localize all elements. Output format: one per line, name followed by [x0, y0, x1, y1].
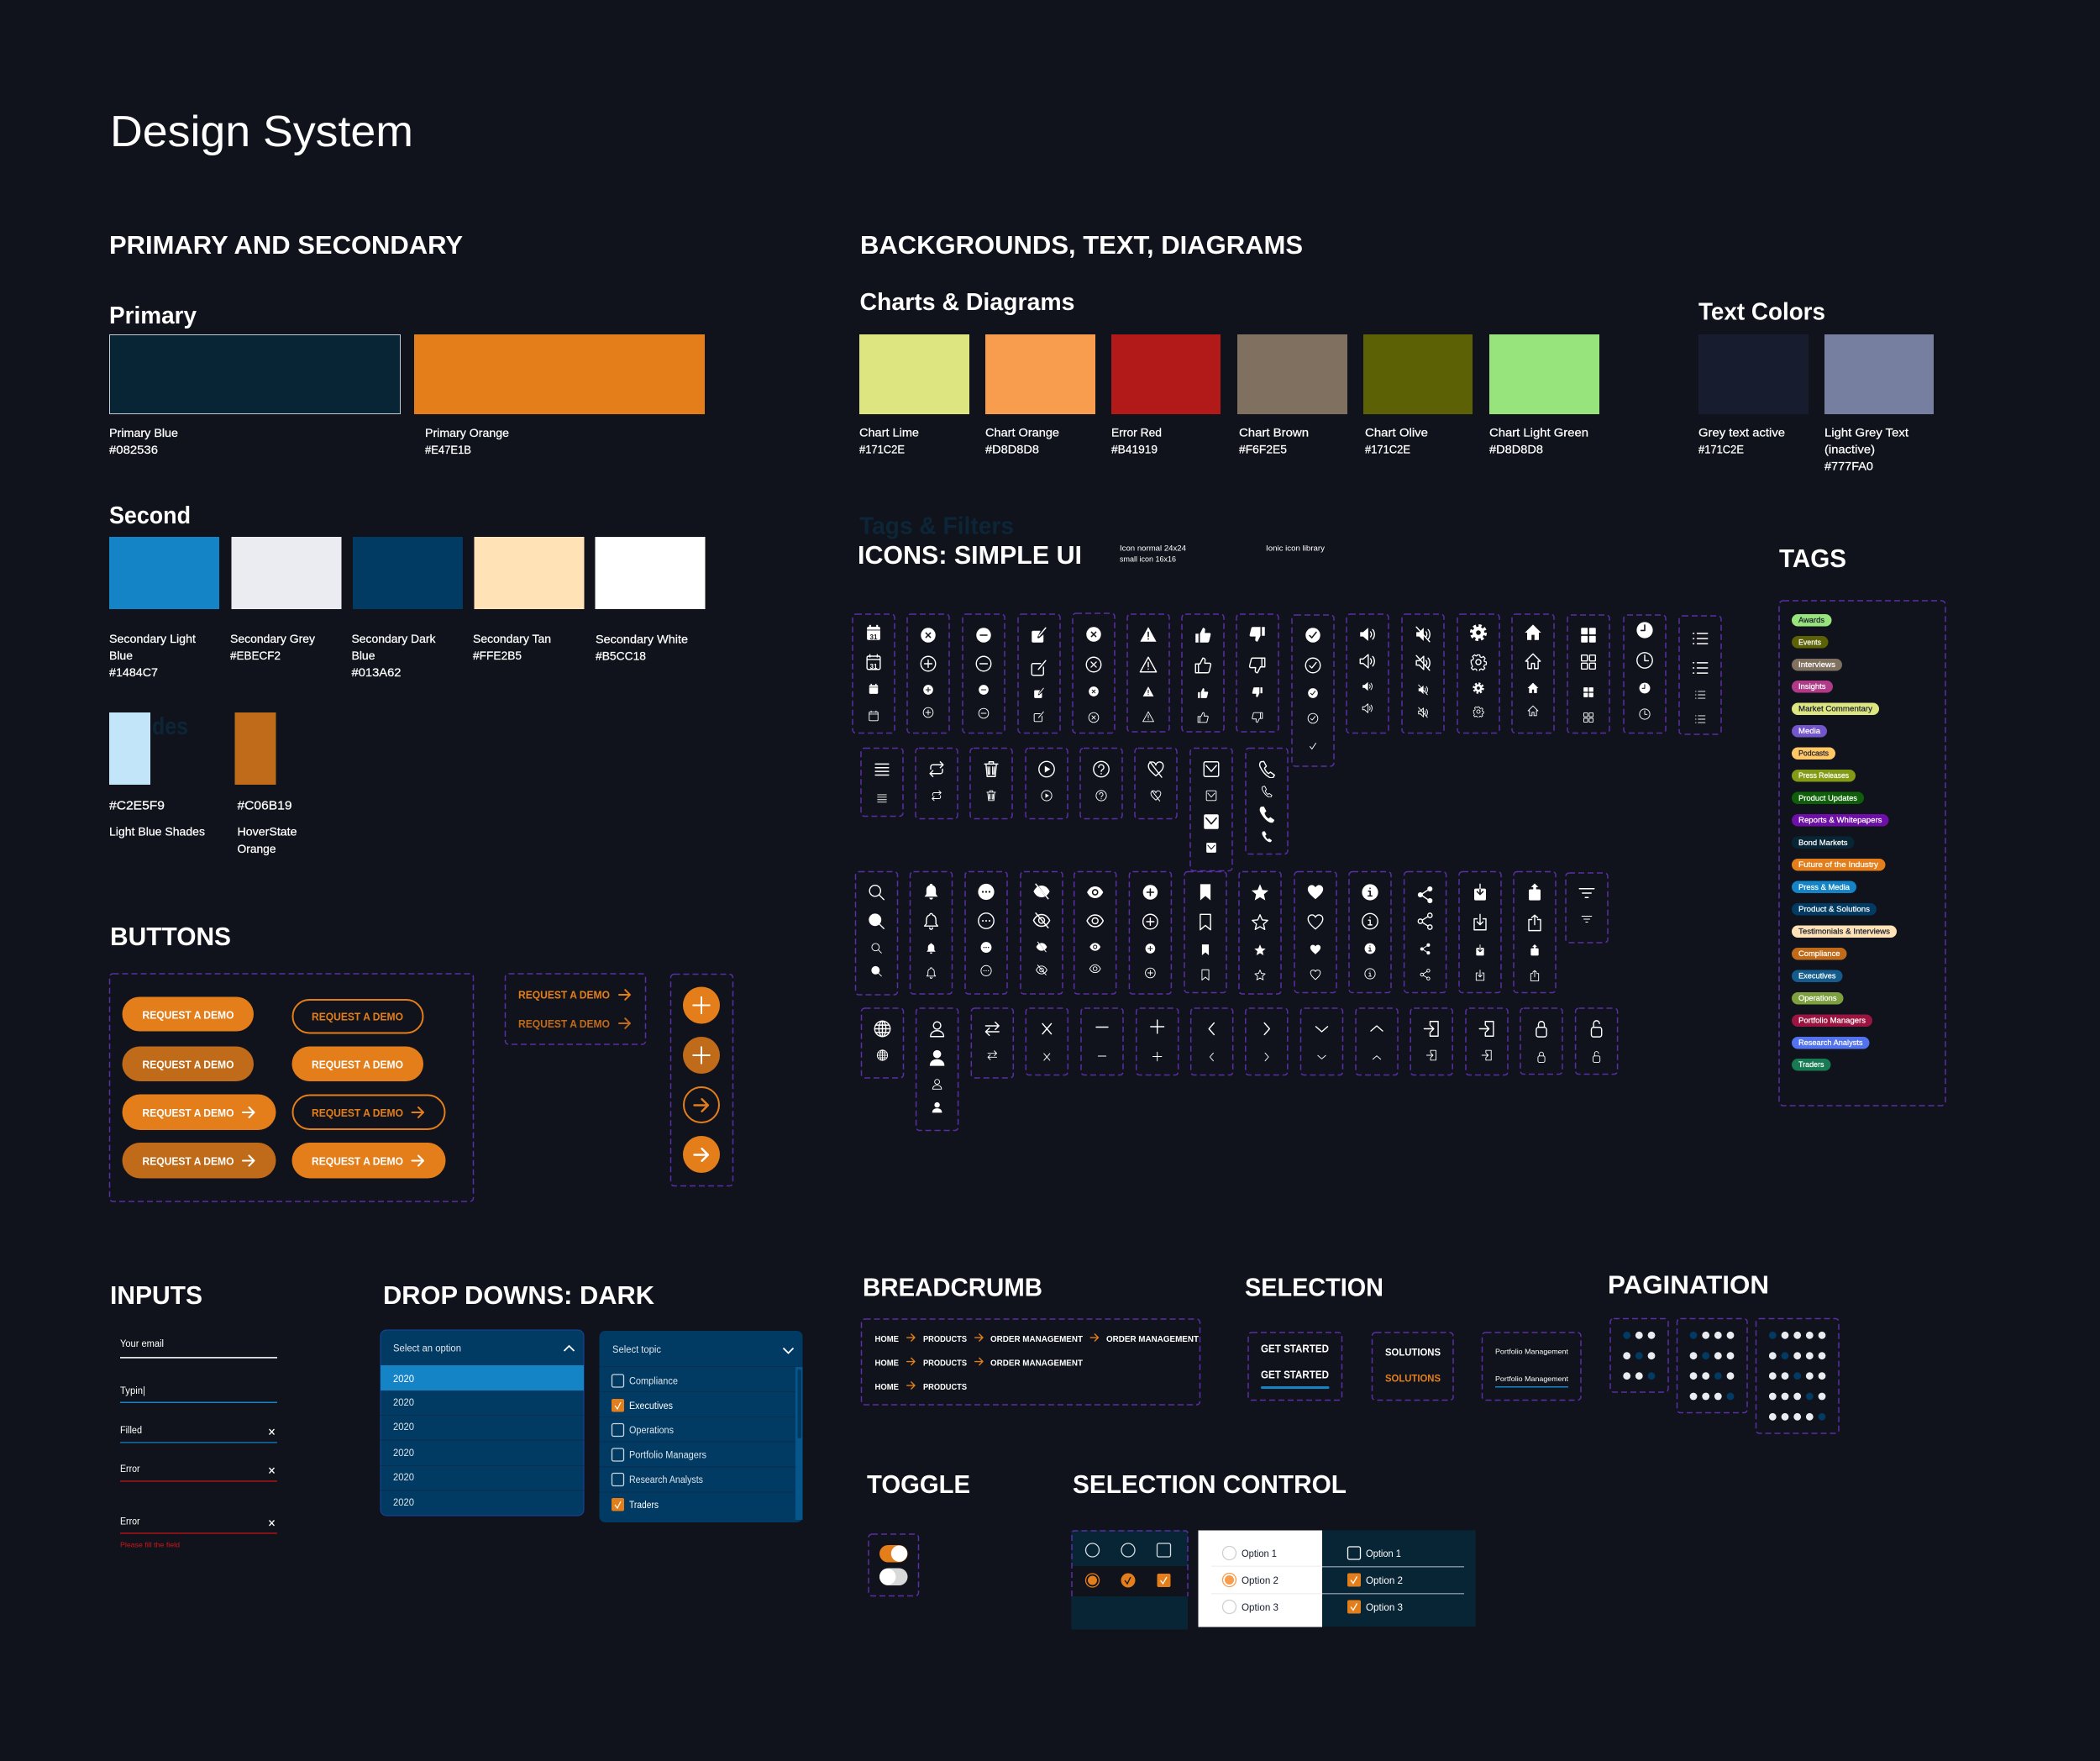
tag: Traders: Traders: [1798, 1060, 1824, 1069]
input: error: Error: [120, 1464, 140, 1475]
swatch: secondary white: Secondary White: [596, 632, 688, 645]
note: icon sizes: Icon normal 24x24: [1120, 544, 1186, 553]
tag: Events: Events: [1798, 639, 1821, 647]
icon column: play: [1026, 748, 1068, 818]
dropdown: select an option: 2020: [393, 1448, 414, 1459]
tag: Press and Media: [1792, 880, 1856, 893]
tag: Product Updates: Product Updates: [1798, 794, 1858, 802]
tag: Portfolio Managers: [1792, 1015, 1872, 1027]
tag: Media: [1792, 725, 1827, 738]
icons: row 4: [862, 1008, 1618, 1131]
panel: radio list on white: Option 3: [1242, 1601, 1278, 1613]
dropdown: select an option: 2020: [393, 1375, 414, 1385]
tag: Executives: Executives: [1798, 972, 1836, 980]
swatch: chart light green: #D8D8D8: [1489, 442, 1543, 455]
tag: Executives: [1792, 970, 1843, 982]
swatch: light grey text: (inactive): [1824, 442, 1875, 455]
input: error: [120, 1464, 277, 1482]
icon column: share: [1404, 872, 1446, 993]
icon column: close circle: [1073, 613, 1115, 733]
icon column: trash: [970, 748, 1012, 818]
swatch: error red: #B41919: [1111, 442, 1158, 455]
dropdown: select topic: Select topic: [612, 1345, 661, 1355]
tag: Interviews: [1792, 659, 1842, 670]
breadcrumb: three levels: PRODUCTS: [923, 1358, 967, 1368]
tag: Product Updates: [1792, 791, 1864, 804]
icon column: minus: [1081, 1008, 1123, 1075]
icon column: plus: [1137, 1008, 1179, 1075]
tag: Operations: [1792, 992, 1843, 1005]
swatch: secondary dark blue: Blue: [351, 649, 375, 662]
icon column: checkmark: [1292, 615, 1334, 766]
swatch: chart light green: Chart Light Green: [1489, 425, 1588, 439]
icon column: unlock: [1576, 1008, 1618, 1074]
tag: Reports and Whitepapers: [1792, 814, 1888, 827]
heading: toggle: TOGGLE: [867, 1469, 970, 1499]
dropdown: select topic: Traders: [629, 1501, 659, 1511]
icon column: lock: [1520, 1008, 1562, 1074]
button: outline: [292, 1000, 423, 1033]
selection: solutions: [1373, 1333, 1453, 1400]
swatch: secondary light blue: Secondary Light: [109, 632, 196, 645]
icon column: grid: [1567, 615, 1609, 733]
button: hover: REQUEST A DEMO: [143, 1059, 234, 1070]
button: filled: REQUEST A DEMO: [143, 1010, 234, 1022]
input: filled: [120, 1426, 277, 1443]
selection: get started: [1248, 1333, 1342, 1400]
swatch: primary orange: Primary Orange: [425, 426, 509, 439]
tag: Testimonials and Interviews: Testimonials & Interviews: [1798, 928, 1891, 936]
icon column: search: [855, 872, 897, 995]
tag: Research Analysts: [1792, 1037, 1870, 1049]
swatch: hover state orange: HoverState: [237, 825, 297, 838]
icon column: mail: [1190, 748, 1232, 870]
input: default: Your email: [120, 1339, 164, 1349]
button: outline: REQUEST A DEMO: [312, 1012, 403, 1023]
tag: Product and Solutions: Product & Solutions: [1798, 905, 1871, 913]
tag: Media: Media: [1798, 727, 1820, 735]
heading: selection control: SELECTION CONTROL: [1073, 1469, 1347, 1499]
icon column: filter: [1566, 873, 1608, 943]
icon column: edit: [1018, 614, 1060, 733]
toggle: off: [879, 1568, 907, 1585]
swatch: primary orange: #E47E1B: [425, 443, 471, 456]
tag: Future of the Industry: [1792, 859, 1885, 870]
swatch: light grey text: [1824, 334, 1934, 472]
icon column: eye: [1074, 872, 1116, 994]
dropdown: select topic: [600, 1331, 803, 1522]
swatch: error red: Error Red: [1111, 425, 1162, 439]
dropdown: select topic: Compliance: [629, 1376, 678, 1386]
input: error with message: Error: [120, 1517, 140, 1527]
swatch: primary blue: [109, 334, 400, 456]
swatch: light grey text: Light Grey Text: [1824, 425, 1908, 439]
icon column: chevron down: [1300, 1008, 1342, 1075]
tag: Press Releases: [1792, 770, 1856, 781]
breadcrumb: two levels: [875, 1382, 967, 1392]
pagination: four pages: [1677, 1319, 1747, 1413]
swatch: secondary grey: [230, 537, 341, 662]
icon column: eye off: [1021, 872, 1063, 994]
icon column: volume: [1347, 614, 1389, 733]
panel: round icon buttons: [670, 975, 732, 1186]
ghost heading: tags and filters: Tags & Filters: [859, 513, 1014, 539]
breadcrumb: four levels: ORDER MANAGEMENT: [1106, 1334, 1200, 1344]
panel: selection control states: [1072, 1531, 1188, 1630]
icon column: thumbs down: [1236, 614, 1278, 732]
dropdown: select an option: [381, 1330, 584, 1516]
swatch: chart olive: #171C2E: [1365, 442, 1410, 455]
dropdown: select an option: Select an option: [393, 1344, 461, 1354]
button: filled secondary: REQUEST A DEMO: [312, 1059, 403, 1070]
tag: Interviews: Interviews: [1798, 660, 1836, 669]
heading: charts and diagrams: Charts & Diagrams: [860, 289, 1075, 316]
tag: Traders: [1792, 1059, 1831, 1070]
icon column: time: [1624, 615, 1666, 733]
icon column: bookmark: [1184, 872, 1226, 993]
icon column: chevron forward: [1246, 1008, 1288, 1075]
panel: radio list on white: [1198, 1531, 1322, 1627]
breadcrumb: four levels: ORDER MANAGEMENT: [990, 1334, 1084, 1344]
heading: selection: SELECTION: [1245, 1272, 1383, 1302]
swatch: error red: [1111, 334, 1221, 455]
icon column: list: [1679, 616, 1721, 734]
icon column: calendar: 31: [870, 633, 878, 641]
tag: Podcasts: Podcasts: [1798, 749, 1829, 758]
icon column: menu: [861, 748, 903, 817]
swatch: chart brown: #F6F2E5: [1239, 442, 1287, 455]
heading: pagination: PAGINATION: [1608, 1270, 1769, 1299]
swatch: chart light green: [1489, 334, 1599, 455]
tag: Reports and Whitepapers: Reports & Whitepapers: [1798, 816, 1882, 824]
tag: Bond Markets: Bond Markets: [1798, 838, 1848, 847]
button: outline with arrow: REQUEST A DEMO: [312, 1107, 403, 1119]
button: filled secondary: [292, 1047, 423, 1081]
button: filled: [123, 996, 254, 1032]
swatch: secondary light blue: Blue: [109, 649, 133, 662]
dropdown: select an option: 2020: [393, 1498, 414, 1508]
swatch: light grey text: #777FA0: [1824, 459, 1873, 472]
swatch: secondary white: #B5CC18: [596, 649, 646, 662]
round button: plus hover: [683, 1037, 720, 1074]
icon column: log in: [1410, 1008, 1452, 1075]
breadcrumb: three levels: HOME: [875, 1358, 899, 1368]
icon column: bell: [911, 872, 953, 994]
tag: Bond Markets: [1792, 837, 1855, 849]
dropdown: select an option: 2020: [393, 1398, 414, 1408]
panel: radio list on white: Option 1: [1242, 1548, 1277, 1559]
note: icon library: Ionic icon library: [1266, 544, 1325, 553]
breadcrumb: three levels: [875, 1358, 1084, 1368]
icon column: globe: [862, 1008, 904, 1078]
input: filled: Filled: [120, 1426, 142, 1436]
heading: second: Second: [109, 502, 191, 529]
swatch: secondary light blue: #1484C7: [109, 665, 158, 679]
panel: breadcrumb: [862, 1319, 1200, 1405]
swatch: grey text active: #171C2E: [1698, 442, 1744, 455]
icon column: heart dislike: [1135, 748, 1177, 818]
swatch: light blue shade: Light Blue Shades: [109, 825, 205, 838]
icon column: warning: [1127, 614, 1169, 732]
swatch: chart lime: Chart Lime: [859, 425, 919, 439]
tag: Product and Solutions: [1792, 903, 1877, 916]
swatch: secondary dark blue: Secondary Dark: [351, 632, 436, 645]
swatch: chart orange: Chart Orange: [985, 425, 1059, 439]
dropdown: select an option: 2020: [393, 1422, 414, 1432]
swatch: grey text active: [1698, 334, 1809, 455]
button: filled secondary with arrow: [292, 1143, 445, 1178]
pagination: three pages: [1610, 1319, 1668, 1392]
icons: row 3: [855, 872, 1608, 995]
heading: icons: ICONS: SIMPLE UI: [858, 540, 1082, 570]
swatch: secondary tan: Secondary Tan: [473, 632, 551, 645]
breadcrumb: three levels: ORDER MANAGEMENT: [990, 1358, 1084, 1368]
tag: Events: [1792, 636, 1828, 649]
selection: solutions: SOLUTIONS: [1385, 1348, 1441, 1358]
tag: Future of the Industry: Future of the Industry: [1798, 860, 1879, 869]
icon column: home: [1512, 614, 1554, 733]
pagination: five pages: [1756, 1319, 1839, 1433]
icon column: ellipsis: [965, 872, 1007, 994]
swatch: chart brown: Chart Brown: [1239, 425, 1309, 439]
swatch: chart lime: [859, 334, 969, 455]
input: typing: Typin|: [120, 1386, 145, 1396]
icon column: information: [1349, 872, 1391, 993]
title: Design System: [110, 108, 413, 156]
icon column: chevron up: [1356, 1008, 1398, 1075]
dropdown: select topic: Research Analysts: [629, 1475, 703, 1485]
heading: drop downs: DROP DOWNS: DARK: [383, 1280, 655, 1310]
heading: inputs: INPUTS: [110, 1280, 202, 1310]
button: hover with arrow: REQUEST A DEMO: [143, 1156, 234, 1168]
tag: Market Commentary: Market Commentary: [1798, 705, 1873, 713]
link button: default: REQUEST A DEMO: [518, 990, 610, 1001]
selection: portfolio management: [1482, 1333, 1581, 1400]
button: hover: [123, 1047, 254, 1081]
icon column: chevron back: [1191, 1008, 1233, 1075]
panel: buttons: [109, 974, 474, 1201]
button: filled with arrow: [123, 1094, 276, 1130]
tag: Press Releases: Press Releases: [1798, 771, 1849, 780]
ghost heading: shades: des: [152, 713, 188, 740]
tag: Operations: Operations: [1798, 994, 1837, 1002]
swatch: chart orange: #D8D8D8: [985, 442, 1039, 455]
swatch: chart brown: [1237, 334, 1347, 455]
icon column: upload: [1514, 872, 1556, 993]
dropdown: select topic: Portfolio Managers: [629, 1450, 706, 1460]
tag: Awards: Awards: [1798, 616, 1825, 624]
toggle: on: [879, 1545, 907, 1563]
button: outline with arrow: [292, 1096, 445, 1129]
breadcrumb: two levels: PRODUCTS: [923, 1382, 967, 1392]
icon column: phone: [1246, 748, 1288, 854]
panel: text link buttons: [506, 974, 645, 1044]
note: icon sizes: [1120, 544, 1186, 565]
swatch: hover state orange: #C06B19: [237, 798, 292, 813]
icon column: mute: [1402, 614, 1444, 733]
panel: radio list on white: Option 2: [1242, 1574, 1278, 1586]
icon column: close: [1026, 1008, 1068, 1075]
icon column: remove circle: [963, 614, 1005, 733]
swatch: grey text active: Grey text active: [1698, 425, 1785, 439]
button: hover with arrow: [123, 1143, 276, 1178]
selection: solutions: SOLUTIONS: [1385, 1375, 1441, 1385]
icon column: thumbs up: [1182, 614, 1224, 732]
icon column: add circle: [907, 614, 949, 733]
swatch: hover state orange: Orange: [237, 842, 276, 855]
icon column: log out: [1466, 1008, 1508, 1075]
button: filled secondary with arrow: REQUEST A DEMO: [312, 1156, 403, 1168]
swatch: chart orange: [985, 334, 1095, 455]
tag: Market Commentary: [1792, 702, 1879, 715]
swatch: secondary light blue: [109, 537, 219, 679]
input: error with message: Please fill the field: [120, 1541, 180, 1549]
swatch: primary blue: Primary Blue: [109, 426, 178, 439]
icon column: help: [1080, 748, 1122, 818]
tag: Portfolio Managers: Portfolio Managers: [1798, 1017, 1866, 1025]
swatch: chart olive: Chart Olive: [1365, 425, 1428, 439]
swatch: chart lime: #171C2E: [859, 442, 905, 455]
swatch: secondary white: [595, 537, 706, 662]
icon column: repeat: [916, 748, 958, 818]
selection: portfolio management: Portfolio Management: [1495, 1375, 1569, 1383]
swatch: primary blue: #082536: [109, 443, 158, 456]
selection: portfolio management: Portfolio Management: [1495, 1348, 1569, 1356]
swatch: hover state orange: [235, 712, 297, 855]
tag: Press and Media: Press & Media: [1798, 883, 1850, 891]
tag: Research Analysts: Research Analysts: [1798, 1038, 1863, 1047]
input: error with message: [120, 1517, 277, 1549]
heading: tags: TAGS: [1779, 544, 1846, 573]
tag: Awards: [1792, 614, 1831, 627]
panel: toggle: [869, 1534, 919, 1596]
tag: Insights: [1792, 681, 1833, 692]
swatch: light blue shade: #C2E5F9: [109, 798, 165, 813]
icon column: star: [1239, 872, 1281, 994]
swatch: primary orange: [414, 334, 705, 456]
icons: row 2: [861, 748, 1288, 870]
icon column: download: [1459, 872, 1501, 993]
swatch: secondary grey: Secondary Grey: [230, 632, 315, 645]
panel: tags: [1779, 601, 1945, 1106]
breadcrumb: two levels: HOME: [875, 1382, 899, 1392]
heading: breadcrumb: BREADCRUMB: [863, 1272, 1042, 1302]
tag: Testimonials and Interviews: [1792, 926, 1897, 938]
dropdown: select topic: Executives: [629, 1401, 673, 1411]
swatch: secondary dark blue: #013A62: [351, 665, 402, 679]
heading: primary: Primary: [109, 302, 197, 329]
heading: primary and secondary: PRIMARY AND SECONDARY: [109, 230, 463, 260]
breadcrumb: four levels: PRODUCTS: [923, 1334, 967, 1344]
icon column: calendar: 31: [870, 663, 878, 670]
icons: row 1: [853, 613, 1721, 766]
round button: plus: [683, 986, 720, 1023]
panel: checkbox list on dark: Option 2: [1366, 1574, 1403, 1586]
dropdown: select topic: Operations: [629, 1426, 674, 1436]
panel: checkbox list on dark: [1322, 1531, 1475, 1627]
icon column: swap: [971, 1008, 1013, 1078]
panel: checkbox list on dark: Option 3: [1366, 1601, 1403, 1613]
selection: get started: GET STARTED: [1261, 1369, 1329, 1381]
icon column: settings: [1457, 614, 1499, 733]
breadcrumb: four levels: [875, 1334, 1200, 1344]
selection: get started: GET STARTED: [1261, 1343, 1329, 1354]
icon column: add: [1129, 872, 1171, 994]
round button: arrow outline: [684, 1087, 719, 1122]
swatch: secondary dark blue: [351, 537, 463, 679]
icon column: person: [916, 1008, 958, 1131]
note: icon sizes: small icon 16x16: [1120, 555, 1176, 565]
dropdown: select an option: 2020: [393, 1473, 414, 1483]
icon column: calendar: [853, 614, 895, 733]
tag: Podcasts: [1792, 748, 1835, 760]
tag: Compliance: [1792, 948, 1846, 959]
swatch: secondary grey: #EBECF2: [230, 649, 281, 662]
button: filled with arrow: REQUEST A DEMO: [143, 1107, 234, 1119]
icon column: heart: [1294, 872, 1336, 993]
swatch: secondary tan: [473, 537, 585, 662]
swatch: secondary tan: #FFE2B5: [473, 649, 522, 662]
round button: arrow filled: [683, 1136, 720, 1173]
breadcrumb: four levels: HOME: [875, 1334, 899, 1344]
heading: text colors: Text Colors: [1698, 299, 1825, 326]
heading: backgrounds, text, diagrams: BACKGROUNDS, TEXT, DIAGRAMS: [860, 230, 1303, 260]
tag: Insights: Insights: [1798, 682, 1826, 691]
panel: checkbox list on dark: Option 1: [1366, 1548, 1401, 1559]
link button: hover: REQUEST A DEMO: [518, 1018, 610, 1030]
swatch: light blue shade: [109, 712, 205, 838]
heading: buttons: BUTTONS: [110, 922, 231, 951]
tag: Compliance: Compliance: [1798, 949, 1840, 958]
swatch: chart olive: [1363, 334, 1473, 455]
